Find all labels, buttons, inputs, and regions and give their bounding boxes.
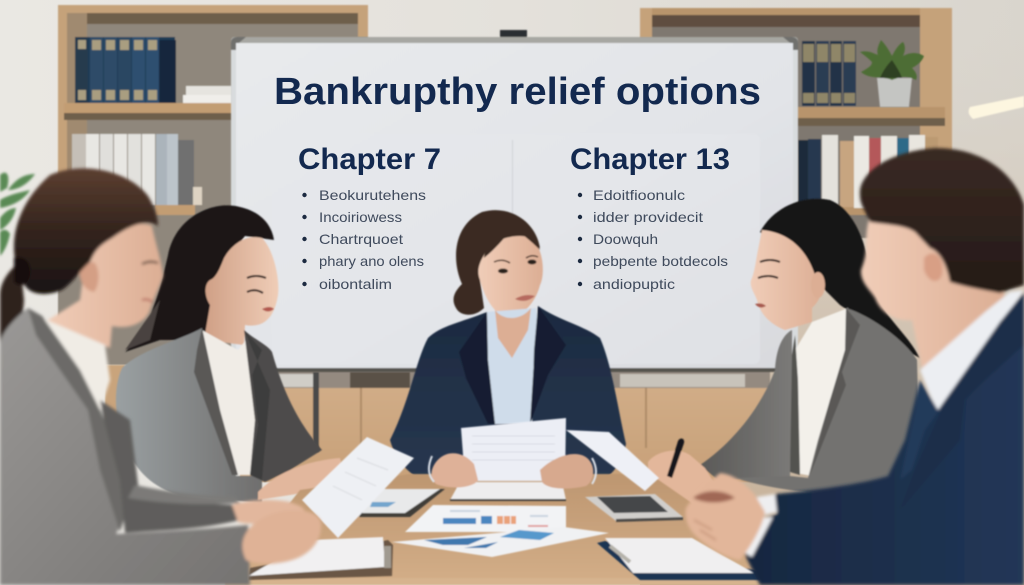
ponytail bbox=[0, 262, 24, 356]
centre woman cuffs bbox=[429, 456, 596, 484]
list: Chapter 13 bullets: idder providecit bbox=[593, 209, 703, 225]
wood meeting table bbox=[225, 474, 810, 585]
person: woman in grey jacket, second from left bbox=[116, 205, 342, 503]
hair bbox=[860, 148, 1024, 293]
shirt bbox=[42, 318, 126, 495]
list: Chapter 13 bullets: pebpente botdecols bbox=[593, 253, 728, 269]
upper cuff bbox=[757, 494, 777, 516]
list: Chapter 7 bullets bbox=[302, 187, 426, 292]
binders bbox=[72, 134, 194, 205]
board title: Bankrupthy relief options bbox=[274, 71, 761, 113]
wall lamp bbox=[969, 96, 1024, 119]
heading: Chapter 7: Chapter 7 bbox=[298, 143, 441, 176]
list: Chapter 13 bullets: andiopuptic bbox=[593, 276, 675, 292]
navy jacket bbox=[745, 292, 1024, 585]
shadow behind lapel bbox=[100, 400, 140, 520]
board frame and surface bbox=[231, 30, 798, 372]
books upper bbox=[802, 41, 856, 106]
tablet with chart on left bbox=[359, 489, 445, 517]
open folder under paper bbox=[450, 482, 566, 501]
laptop bbox=[585, 494, 683, 522]
lower hand bbox=[232, 500, 304, 524]
hair bbox=[14, 168, 158, 294]
centre woman right hand bbox=[540, 454, 593, 489]
left bookshelf bbox=[58, 5, 368, 365]
clipboard front left bbox=[248, 537, 393, 580]
list: Chapter 13 bullets: Edoitfioonulc bbox=[593, 187, 685, 203]
icon: potted plant on shelf bbox=[860, 40, 924, 107]
person: foreground man at right bbox=[685, 148, 1024, 585]
hand bbox=[258, 458, 342, 500]
collar bbox=[920, 290, 1024, 412]
lapel bbox=[28, 308, 130, 532]
centre woman left hand bbox=[432, 453, 478, 487]
paper held by centre woman bbox=[461, 418, 566, 481]
heading: Chapter 13: Chapter 13 bbox=[570, 143, 730, 176]
list: Chapter 7 bullets: phary ano olens bbox=[319, 253, 424, 269]
books lower bbox=[798, 135, 938, 208]
person: centre woman in navy blazer bbox=[390, 210, 626, 482]
lower cuff bbox=[743, 517, 773, 557]
face and neck bbox=[861, 210, 1005, 368]
paper at right of centre bbox=[566, 430, 659, 491]
list: Chapter 13 bullets: Doowquh bbox=[593, 231, 658, 247]
list: Chapter 7 bullets: Beokurutehens bbox=[319, 187, 426, 203]
whiteboard bbox=[231, 30, 798, 372]
diagram sheet bbox=[392, 527, 609, 557]
clipboard front right bbox=[597, 538, 770, 580]
panel: Chapter 7 bbox=[298, 143, 441, 292]
list: Chapter 7 bullets: oibontalim bbox=[319, 276, 392, 292]
list: Chapter 7 bullets: Incoiriowess bbox=[319, 209, 402, 225]
list: Chapter 7 bullets: Chartrquoet bbox=[319, 231, 403, 247]
icon: plant at left edge bbox=[0, 173, 35, 256]
person: woman in grey jacket, right of centre bbox=[648, 199, 920, 509]
clasped hands bbox=[685, 473, 765, 560]
books bbox=[75, 37, 176, 103]
dark sleeve bbox=[104, 420, 242, 533]
wood cabinet behind the board bbox=[105, 365, 770, 482]
jacket body bbox=[0, 308, 250, 585]
ear bbox=[924, 253, 942, 281]
chart sheet bbox=[405, 505, 566, 532]
list: Chapter 13 bullets bbox=[578, 187, 728, 292]
person: foreground woman at left bbox=[0, 168, 321, 585]
paperwork on the table bbox=[248, 418, 770, 580]
icon: black pen bbox=[667, 439, 684, 478]
neck and face bbox=[45, 224, 163, 348]
tilted paper held by front-left woman bbox=[302, 437, 414, 538]
right bookshelf bbox=[640, 8, 952, 238]
eyes and mouth bbox=[142, 262, 158, 264]
panel: Chapter 13 bbox=[570, 143, 730, 292]
